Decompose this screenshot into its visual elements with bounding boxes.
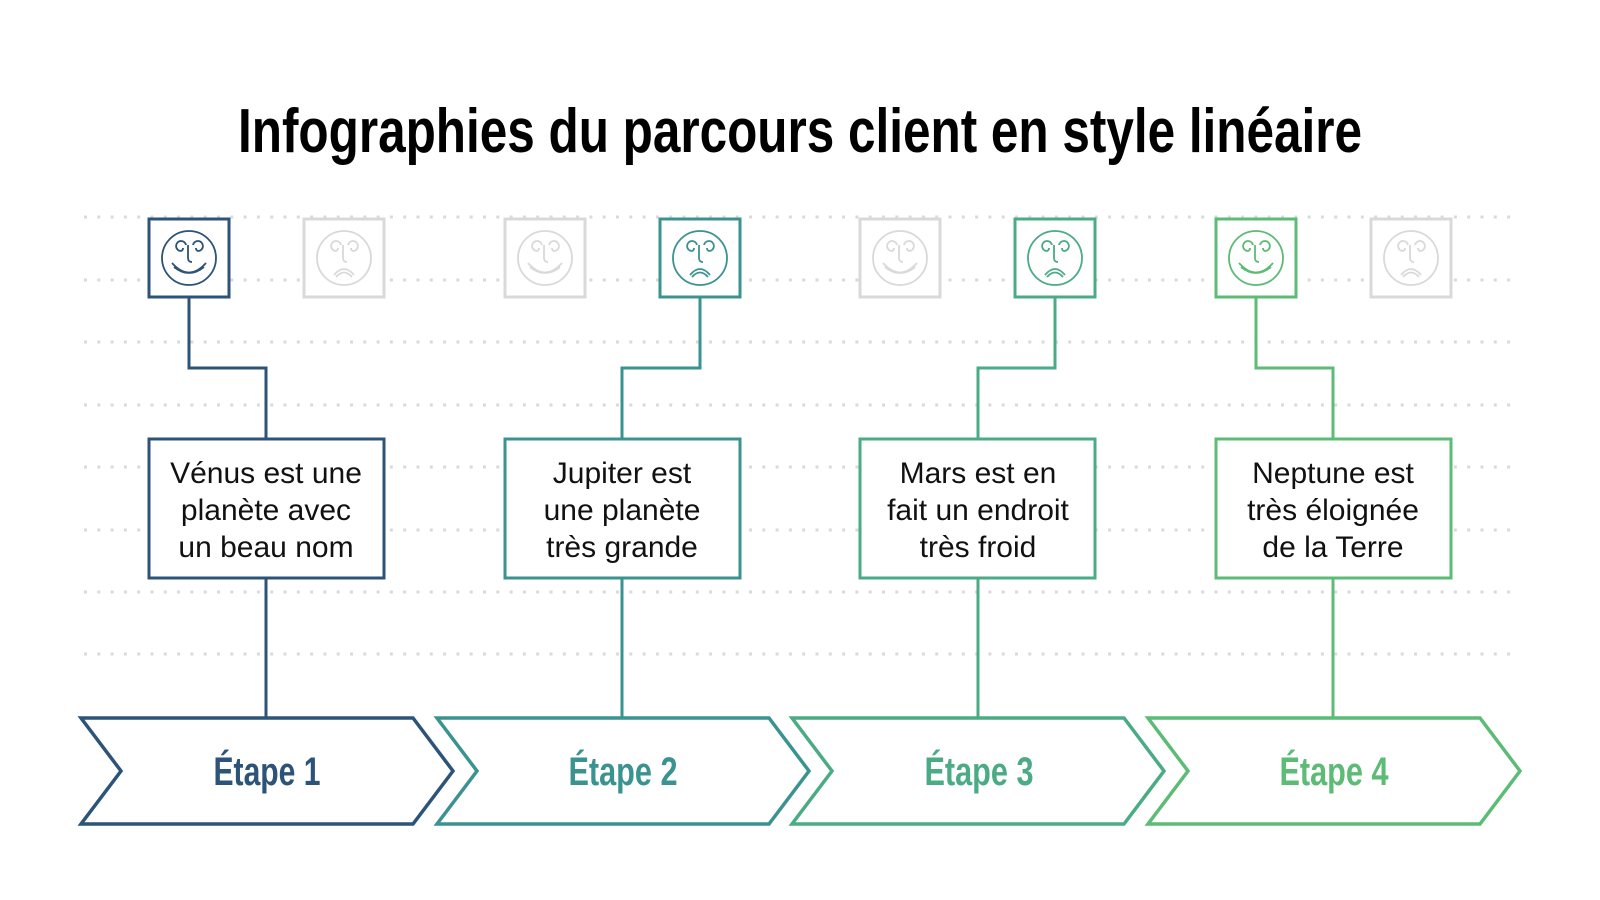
text box: de la Terre	[1262, 531, 1404, 564]
icon: sad face inactive	[1371, 219, 1451, 297]
icon: sad face inactive	[304, 219, 384, 297]
connector	[622, 297, 700, 718]
step 3	[792, 219, 1164, 824]
connector	[978, 297, 1055, 718]
chevron: Étape 4: Étape 4	[1280, 749, 1389, 794]
text box: Mars est en	[900, 457, 1056, 490]
step 2	[437, 219, 809, 824]
text box: très froid	[920, 531, 1036, 564]
text box	[1216, 439, 1451, 578]
icon: happy face inactive	[860, 219, 940, 297]
icon: sad face active	[1015, 219, 1095, 297]
chevron: Étape 2: Étape 2	[568, 749, 678, 794]
chevron: Étape 4	[1148, 718, 1520, 824]
text box: planète avec	[181, 494, 351, 527]
text box: Neptune est	[1252, 457, 1415, 490]
icon: sad face active	[660, 219, 740, 297]
text box	[860, 439, 1095, 578]
chevron: Étape 3	[792, 718, 1164, 824]
text box	[149, 439, 384, 578]
connector	[189, 297, 266, 718]
chevron: Étape 1: Étape 1	[214, 749, 320, 794]
icon: happy face inactive	[505, 219, 585, 297]
icon: happy face active	[149, 219, 229, 297]
icon: happy face active	[1216, 219, 1296, 297]
text box: Vénus est une	[170, 457, 362, 490]
connector	[1256, 297, 1333, 718]
step 4	[1148, 219, 1520, 824]
text box: très grande	[546, 531, 698, 564]
text box: une planète	[544, 494, 700, 527]
text box: fait un endroit	[887, 494, 1070, 527]
text box: très éloignée	[1247, 494, 1419, 527]
text box	[505, 439, 740, 578]
text box: un beau nom	[178, 531, 354, 564]
chevron: Étape 1	[81, 718, 453, 824]
step 1	[81, 219, 453, 824]
chevron: Étape 3: Étape 3	[924, 749, 1034, 794]
chevron: Étape 2	[437, 718, 809, 824]
text box: Jupiter est	[553, 457, 692, 490]
